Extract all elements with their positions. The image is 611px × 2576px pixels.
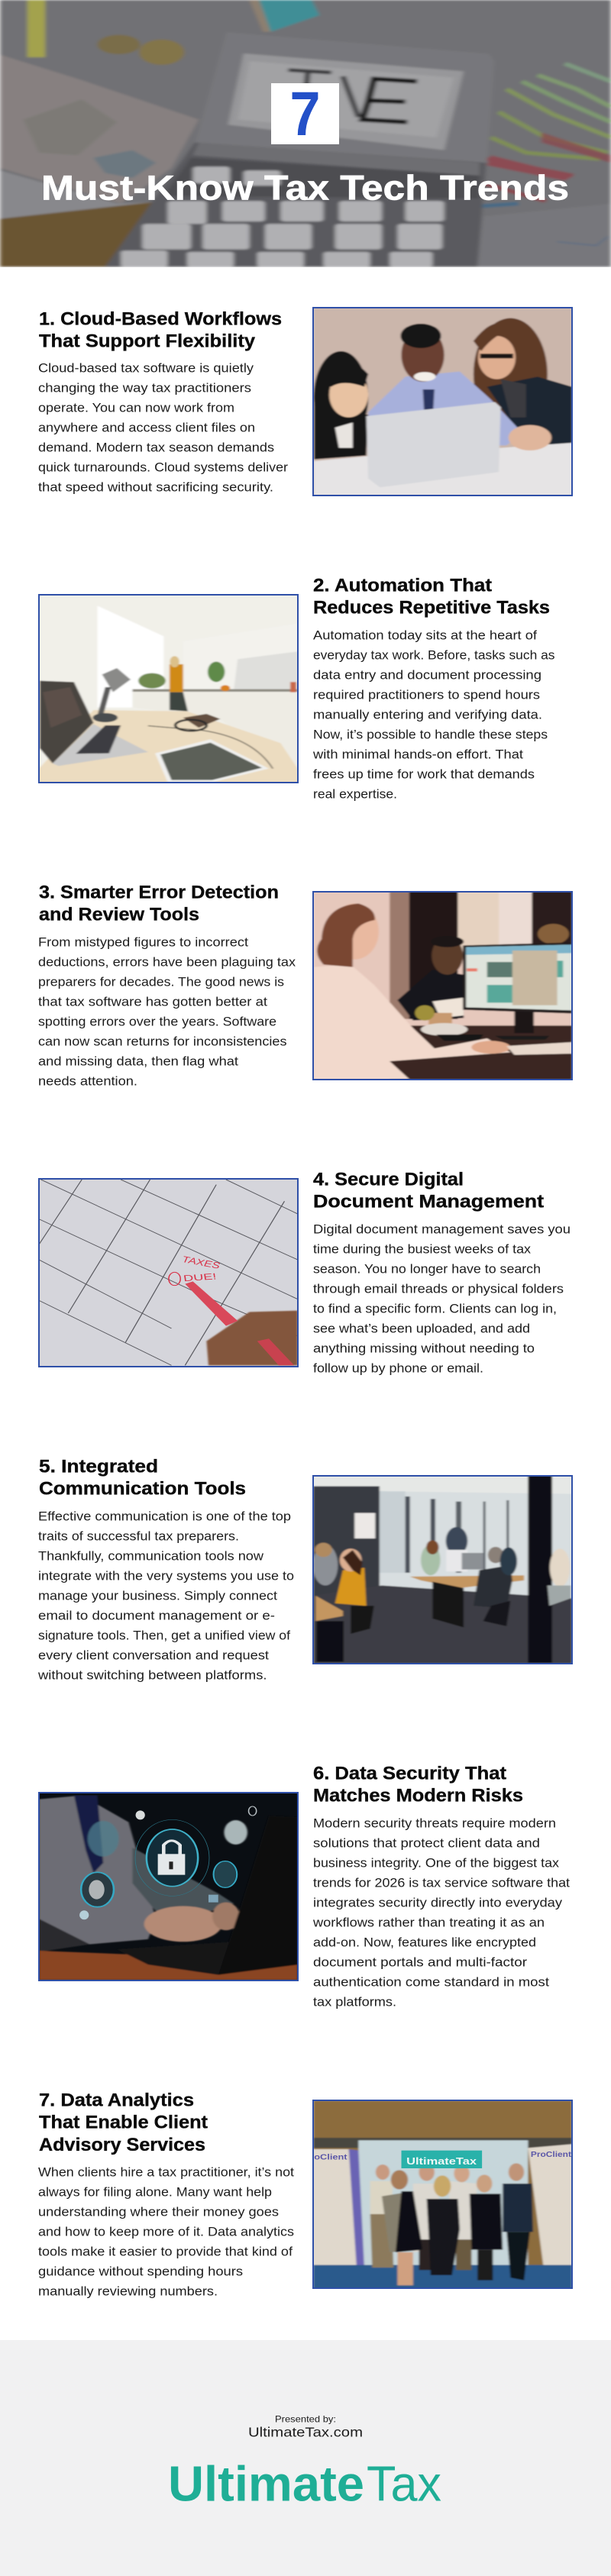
heading 2 — [313, 575, 550, 618]
presented by credit — [248, 2414, 363, 2440]
body text 1: demand. Modern tax season demands — [38, 440, 274, 454]
heading 2: Reduces Repetitive Tasks — [313, 597, 550, 618]
body text 5: Thankfully, communication tools now — [38, 1548, 264, 1563]
body text 7: When clients hire a tax practitioner, it’s not — [38, 2164, 294, 2179]
photo: UltimateTax team at a trade show booth: UltimateTax — [406, 2155, 477, 2167]
body text 5: without switching between platforms. — [37, 1667, 267, 1682]
body text 2: Automation today sits at the heart of — [313, 628, 537, 642]
body text 1: operate. You can now work from — [38, 400, 234, 415]
section 6: data security — [39, 1764, 570, 2009]
photo: calendar with taxes due marked in red: TAXES — [180, 1255, 221, 1271]
photo: calendar with taxes due marked in red: DUE! — [183, 1272, 217, 1283]
body text 7: manually reviewing numbers. — [38, 2284, 218, 2298]
body text 2: with minimal hands-on effort. That — [312, 747, 523, 761]
body text 1 — [38, 360, 288, 494]
photo: two colleagues at a desk with monitor — [313, 892, 572, 1080]
body text 6: Modern security threats require modern — [313, 1816, 556, 1831]
section 3: error detection — [38, 882, 572, 1088]
body text 2: frees up time for work that demands — [313, 767, 535, 781]
body text 4: to find a specific form. Clients can log in, — [313, 1301, 557, 1315]
heading 7 — [39, 2090, 208, 2155]
heading 7: Advisory Services — [39, 2135, 205, 2155]
heading 6 — [313, 1764, 523, 1806]
body text 4: Digital document management saves you — [313, 1222, 571, 1236]
photo: UltimateTax team at a trade show booth — [313, 2100, 572, 2289]
number badge: 7 — [290, 79, 321, 149]
photo: UltimateTax team at a trade show booth: oClient — [314, 2152, 348, 2161]
heading 2: 2. Automation That — [313, 575, 492, 596]
heading 7: 7. Data Analytics — [39, 2090, 194, 2110]
body text 2: real expertise. — [313, 786, 397, 801]
body text 1: changing the way tax practitioners — [38, 380, 251, 395]
section 4: document management — [39, 1170, 571, 1375]
body text 6 — [312, 1816, 570, 2009]
body text 6: business integrity. One of the biggest tax — [313, 1856, 560, 1871]
photo: bright home office with laptop and tablet — [39, 595, 298, 783]
photo: hands on laptop with digital security padlock — [39, 1793, 298, 1980]
body text 3: preparers for decades. The good news is — [38, 974, 284, 989]
body text 3: spotting errors over the years. Software — [38, 1014, 276, 1028]
photo: UltimateTax team at a trade show booth: ProClient — [531, 2150, 572, 2158]
body text 2 — [312, 628, 554, 801]
body text 3: that tax software has gotten better at — [38, 994, 267, 1009]
heading 3 — [39, 882, 279, 925]
section 1: cloud-based workflows — [38, 308, 572, 496]
body text 4 — [313, 1222, 571, 1375]
body text 4: see what’s been uploaded, and add — [313, 1321, 530, 1335]
body text 4: follow up by phone or email. — [313, 1361, 483, 1375]
body text 1: Cloud-based tax software is quietly — [38, 360, 254, 375]
body text 6: document portals and multi-factor — [313, 1955, 527, 1970]
body text 7: always for filing alone. Many want help — [38, 2184, 272, 2199]
body text 1: that speed without sacrificing security. — [38, 479, 273, 494]
body text 4: season. You no longer have to search — [313, 1261, 541, 1276]
body text 7: tools make it easier to provide that kind of — [38, 2244, 293, 2258]
body text 7: understanding where their money goes — [38, 2204, 279, 2219]
body text 5: Effective communication is one of the top — [38, 1509, 291, 1523]
body text 5: manage your business. Simply connect — [38, 1588, 277, 1603]
body text 6: tax platforms. — [313, 1995, 396, 2009]
body text 5: email to document management or e- — [38, 1608, 275, 1622]
body text 7: guidance without spending hours — [38, 2264, 243, 2278]
body text 7 — [38, 2164, 294, 2298]
logo: UltimateTax: Tax — [367, 2456, 441, 2512]
body text 3 — [38, 935, 296, 1088]
heading 6: 6. Data Security That — [313, 1764, 506, 1784]
body text 1: quick turnarounds. Cloud systems deliver — [38, 460, 288, 474]
body text 2: manually entering and verifying data. — [313, 707, 542, 721]
section 2: automation — [39, 575, 554, 801]
body text 5 — [37, 1509, 294, 1682]
body text 2: everyday tax work. Before, tasks such as — [313, 647, 554, 662]
heading 1: That Support Flexibility — [39, 331, 256, 351]
heading 1 — [39, 308, 282, 351]
body text 6: solutions that protect client data and — [313, 1836, 540, 1851]
heading 3: 3. Smarter Error Detection — [39, 882, 279, 902]
section 7: data analytics — [38, 2090, 572, 2298]
body text 6: workflows rather than treating it as an — [312, 1916, 545, 1930]
header banner — [0, 0, 611, 266]
photo: three colleagues around a laptop — [313, 308, 572, 496]
body text 6: trends for 2026 is tax service software that — [313, 1876, 570, 1890]
heading 7: That Enable Client — [39, 2113, 208, 2133]
body text 6: authentication come standard in most — [313, 1975, 549, 1990]
body text 3: deductions, errors have been plaguing tax — [38, 954, 296, 969]
heading 1: 1. Cloud-Based Workflows — [39, 308, 282, 329]
body text 5: signature tools. Then, get a unified view of — [38, 1628, 290, 1642]
body text 2: required practitioners to spend hours — [313, 687, 540, 702]
body text 4: through email threads or physical folders — [313, 1281, 564, 1296]
main title: Must-Know Tax Tech Trends — [41, 169, 569, 208]
body text 3: From mistyped figures to incorrect — [38, 935, 248, 949]
footer panel — [0, 2340, 611, 2576]
logo: UltimateTax: Ultimate — [168, 2456, 364, 2512]
body text 5: integrate with the very systems you use to — [38, 1568, 294, 1583]
heading 5: 5. Integrated — [39, 1456, 158, 1477]
body text 1: anywhere and access client files on — [38, 420, 255, 434]
body text 3: can now scan returns for inconsistencies — [38, 1034, 287, 1048]
body text 6: add-on. Now, features like encrypted — [313, 1935, 536, 1950]
body text 3: and missing data, then flag what — [38, 1054, 238, 1068]
body text 2: data entry and document processing — [313, 667, 541, 682]
heading 4 — [313, 1170, 544, 1212]
header photo: calculator on tax papers — [0, 0, 611, 266]
heading 5 — [39, 1456, 246, 1499]
body text 6: integrates security directly into everyday — [313, 1896, 563, 1910]
heading 6: Matches Modern Risks — [313, 1786, 523, 1806]
body text 5: traits of successful tax preparers. — [38, 1528, 239, 1543]
heading 3: and Review Tools — [39, 905, 199, 925]
presented by credit: Presented by: — [275, 2414, 336, 2425]
body text 2: Now, it’s possible to handle these steps — [313, 727, 548, 741]
body text 4: time during the busiest weeks of tax — [313, 1241, 532, 1256]
photo: open plan office with team at desks — [313, 1476, 572, 1664]
body text 3: needs attention. — [38, 1073, 137, 1088]
heading 4: 4. Secure Digital — [313, 1170, 464, 1190]
body text 4: anything missing without needing to — [313, 1341, 535, 1355]
presented by credit: UltimateTax.com — [248, 2425, 363, 2440]
number badge — [271, 79, 339, 149]
heading 4: Document Management — [313, 1192, 544, 1212]
body text 5: every client conversation and request — [38, 1648, 269, 1662]
heading 5: Communication Tools — [39, 1479, 246, 1499]
body text 7: and how to keep more of it. Data analytics — [38, 2224, 294, 2239]
photo: calendar with taxes due marked in red — [39, 1179, 298, 1367]
section 5: communication tools — [37, 1456, 572, 1682]
